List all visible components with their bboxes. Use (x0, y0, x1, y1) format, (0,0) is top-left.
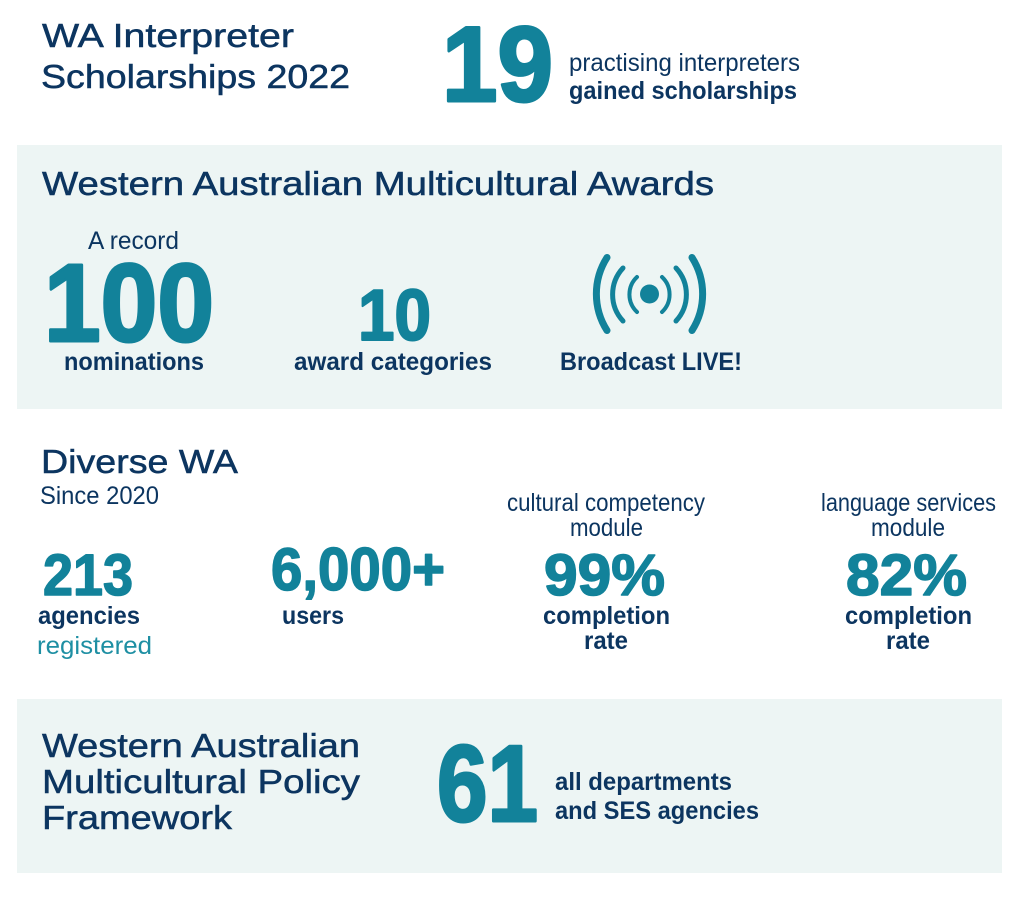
heading: WA Interpreter Scholarships 2022: Scholarships 2022 (41, 58, 350, 95)
heading: Western Australian Multicultural Policy Framework (42, 727, 361, 836)
stat: cultural competency module 99% completion rate: module (570, 514, 643, 542)
stat: language services module 82% completion rate: module (871, 514, 945, 542)
heading: WA Interpreter Scholarships 2022 (41, 17, 350, 95)
text: all departments and SES agencies: all departments (555, 768, 732, 796)
stat: 6,000+ users (271, 536, 445, 630)
text: practising interpreters gained scholarships: practising interpreters (569, 49, 800, 77)
stat: a record 100 nominations: A record (88, 227, 179, 255)
stat: language services module 82% completion rate (821, 489, 996, 655)
panel: Western Australian Multicultural Awards (17, 145, 1002, 409)
stat: a record 100 nominations: nominations (64, 348, 204, 376)
stat: cultural competency module 99% completion rate: cultural competency (507, 489, 705, 517)
icon: broadcast signal (596, 258, 703, 330)
heading: WA Interpreter Scholarships 2022: WA Interpreter (42, 17, 294, 54)
stat: 19: 19 (442, 4, 553, 124)
panel background (17, 145, 1002, 409)
stat: 6,000+ users: 6,000+ (271, 536, 445, 603)
heading: Western Australian Multicultural Policy Framework: Western Australian (42, 727, 360, 764)
stat: cultural competency module 99% completion rate: rate (584, 627, 628, 655)
subheading: Since 2020: Since 2020 (40, 482, 159, 510)
stat: 10 award categories (294, 276, 492, 376)
heading: Western Australian Multicultural Policy Framework: Multicultural Policy (42, 763, 361, 800)
text: practising interpreters gained scholarships (569, 49, 800, 105)
stat: cultural competency module 99% completion rate (507, 489, 705, 655)
label: Broadcast LIVE!: Broadcast LIVE! (560, 348, 742, 376)
text: all departments and SES agencies: and SES agencies (555, 797, 759, 825)
heading: Western Australian Multicultural Awards: Western Australian Multicultural Awards (42, 165, 714, 202)
stat: cultural competency module 99% completion rate: 99% (544, 543, 665, 608)
stat: 213 agencies registered (37, 543, 152, 660)
stat: language services module 82% completion rate: language services (821, 489, 996, 517)
stat: 6,000+ users: users (282, 602, 344, 630)
section: WA Interpreter Scholarships (41, 4, 800, 124)
text: practising interpreters gained scholarships: gained scholarships (569, 77, 797, 105)
stat: language services module 82% completion rate: completion (845, 602, 972, 630)
stat: 213 agencies registered: 213 (43, 543, 133, 608)
section: Diverse WA (37, 443, 996, 660)
panel background (17, 699, 1002, 873)
text: all departments and SES agencies (555, 768, 759, 825)
stat: a record 100 nominations: 100 (44, 242, 214, 365)
panel: Western Australian Multicultural Policy Framework (17, 699, 1002, 873)
stat: 61: 61 (437, 723, 538, 845)
stat: 213 agencies registered: agencies (38, 602, 140, 630)
heading: Diverse WA: Diverse WA (41, 443, 238, 480)
stat: cultural competency module 99% completion rate: completion (543, 602, 670, 630)
heading: Western Australian Multicultural Policy Framework: Framework (42, 799, 233, 836)
stat: 10 award categories: award categories (294, 348, 492, 376)
stat: language services module 82% completion rate: rate (886, 627, 930, 655)
stat: language services module 82% completion rate: 82% (846, 543, 967, 608)
stat: 213 agencies registered: registered (37, 632, 152, 660)
stat: 10 award categories: 10 (358, 276, 431, 356)
